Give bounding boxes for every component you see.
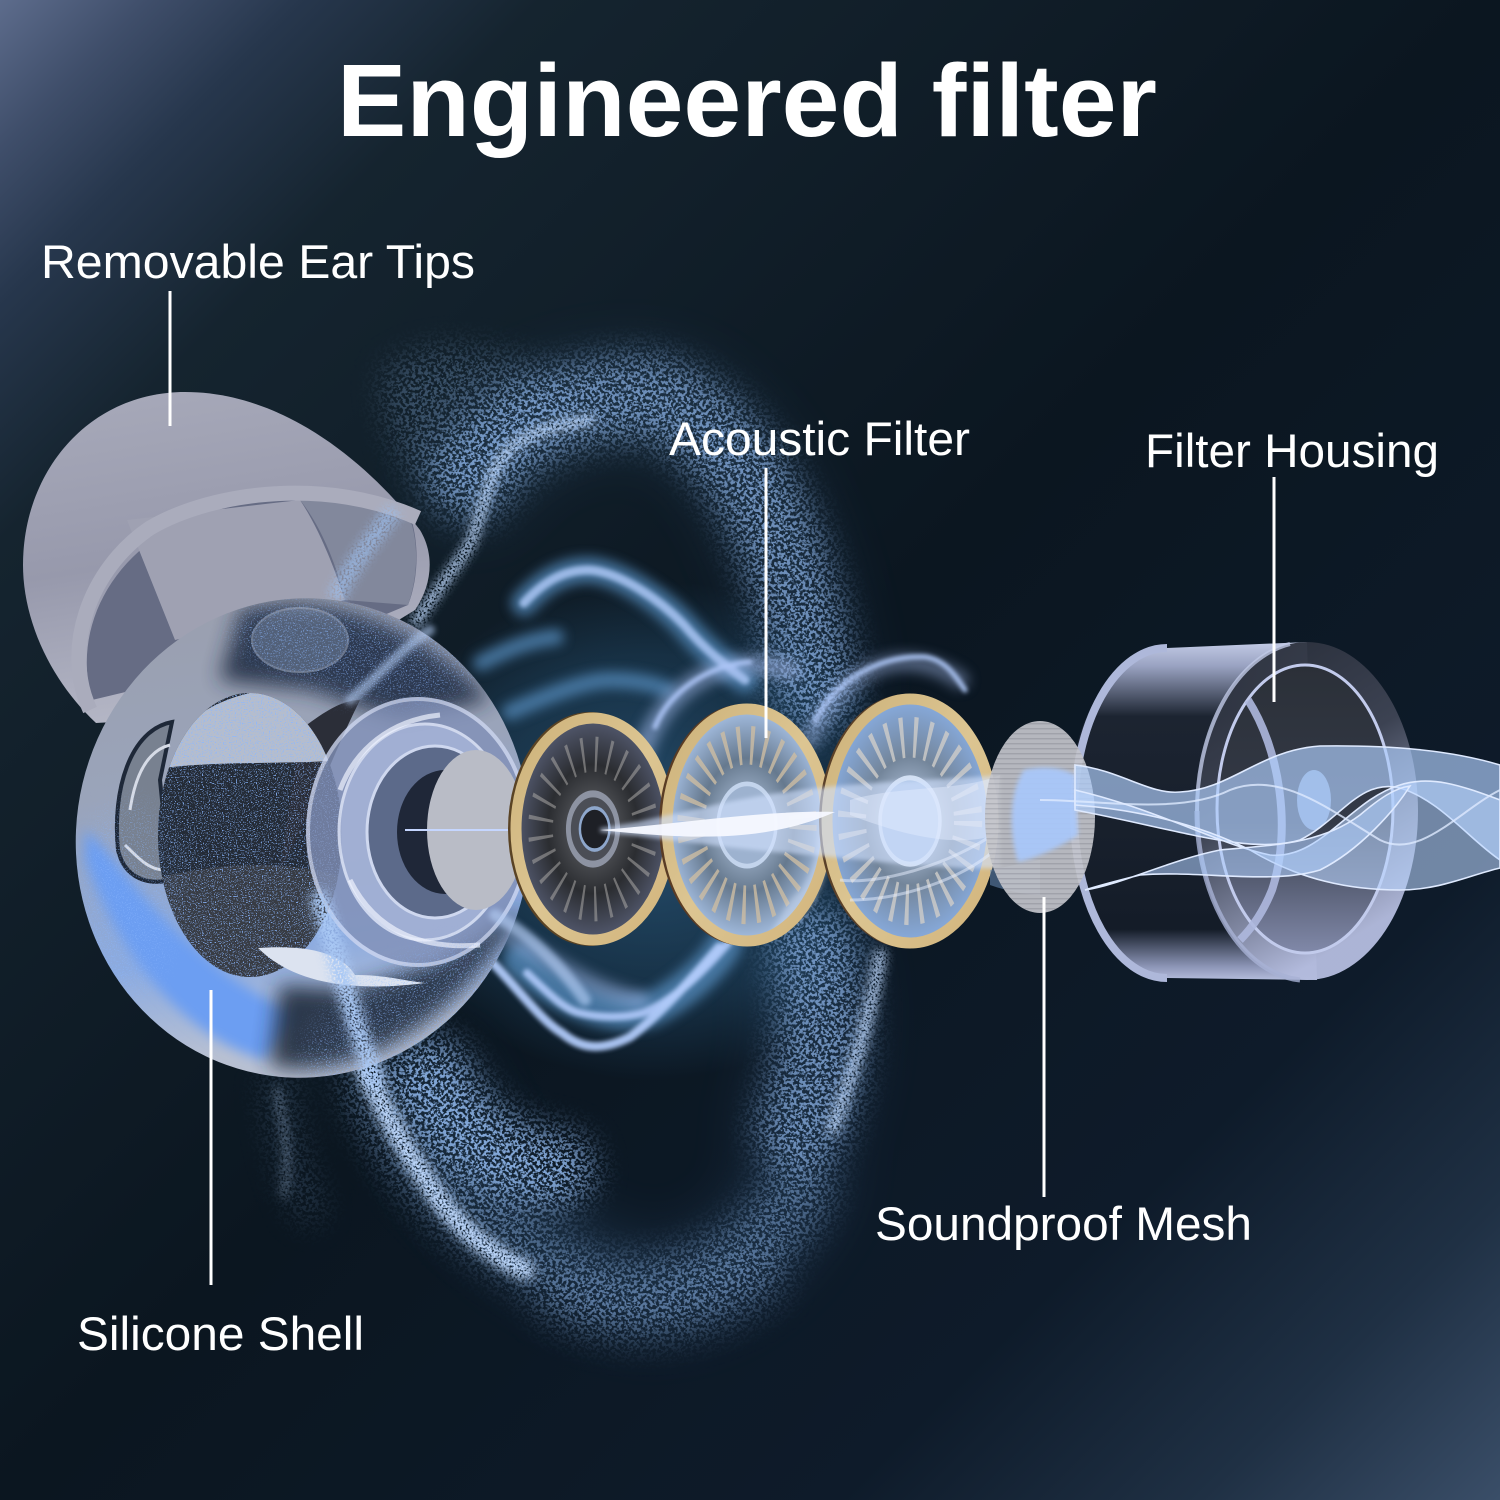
filter housing — [1068, 642, 1418, 980]
label: silicone shell — [77, 990, 364, 1360]
filter ring two — [659, 704, 830, 946]
ear tip component — [23, 392, 430, 723]
dark glitter core — [158, 693, 342, 977]
particle sound cloud — [277, 365, 965, 1317]
particles through the tip — [335, 510, 395, 600]
white swoosh — [258, 947, 425, 986]
label: silicone shell: Silicone Shell — [77, 1307, 364, 1360]
filter ring one — [508, 712, 672, 946]
blue lower-left crescent — [85, 830, 300, 1060]
label: removable ear tips: Removable Ear Tips — [41, 235, 475, 288]
barrel — [308, 699, 528, 965]
title: Engineered filter — [337, 43, 1157, 158]
label: acoustic filter: Acoustic Filter — [669, 412, 970, 465]
silicone shell — [76, 598, 523, 1078]
inner back ring — [1240, 700, 1282, 940]
label: soundproof mesh: Soundproof Mesh — [875, 1197, 1252, 1250]
label: soundproof mesh — [875, 897, 1252, 1250]
particle stream across shell — [320, 630, 585, 1080]
label: acoustic filter — [669, 412, 970, 738]
air flow ribbons — [1040, 746, 1500, 890]
central light beam — [600, 775, 1000, 900]
left side bubble — [117, 722, 172, 882]
bright smooth wisps — [487, 570, 965, 1046]
small nozzle — [1297, 770, 1331, 830]
label: filter housing: Filter Housing — [1145, 424, 1439, 477]
top inner lens — [252, 608, 348, 672]
filter ring three — [819, 694, 995, 948]
under-glow of the bands — [430, 398, 817, 1290]
soft teal glow streams — [481, 570, 745, 1013]
diffuse particle bands — [280, 365, 822, 1317]
glitter overlay — [80, 584, 539, 1115]
label: filter housing — [1145, 424, 1439, 702]
sharp particle edges — [277, 420, 880, 1270]
housing front ring — [1196, 642, 1418, 980]
soundproof mesh disc — [985, 721, 1095, 913]
label: removable ear tips — [41, 235, 475, 426]
rear disc — [427, 750, 525, 910]
